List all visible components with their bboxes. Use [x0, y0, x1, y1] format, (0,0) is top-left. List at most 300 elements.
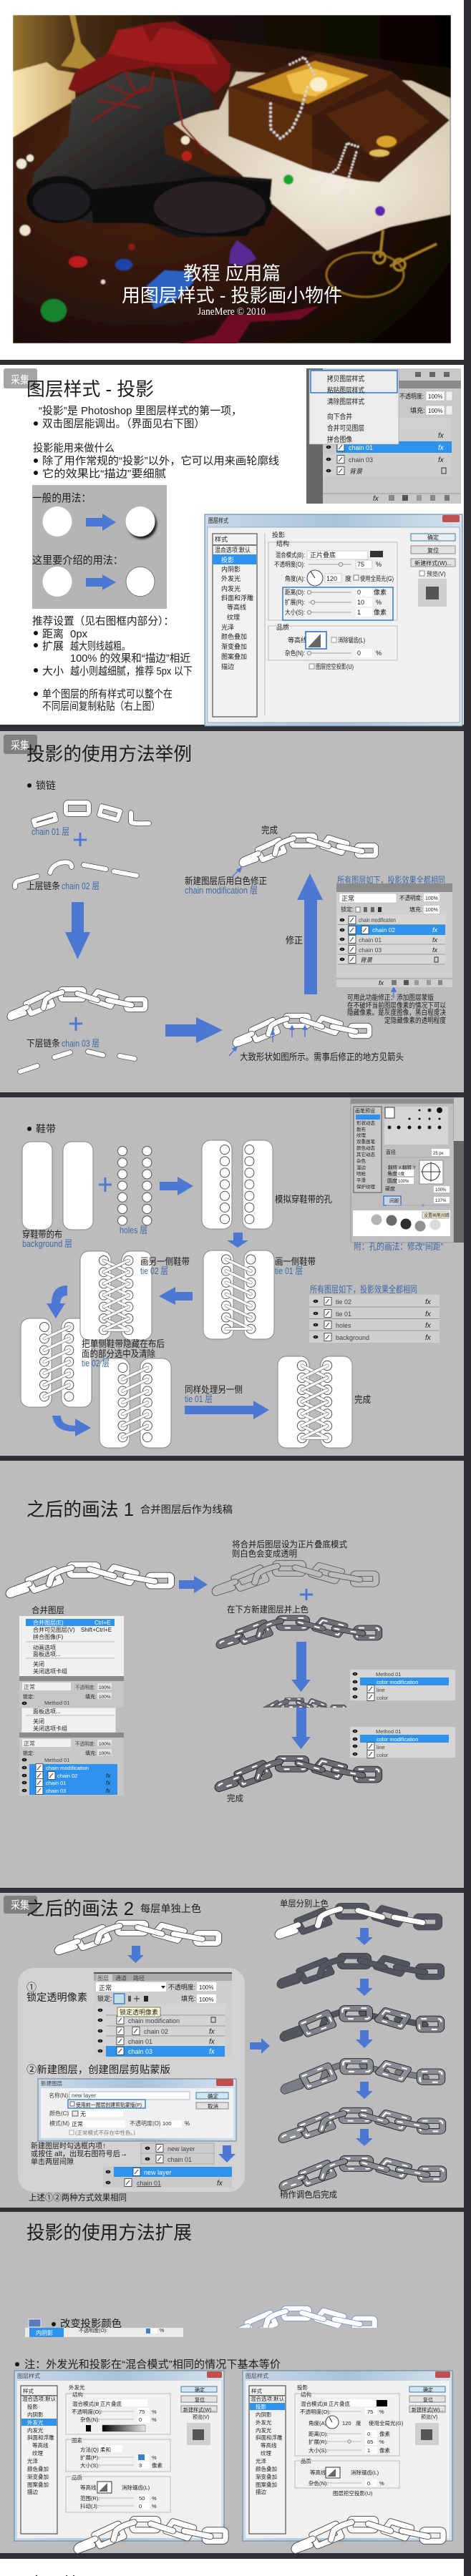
step one label	[26, 1982, 87, 2003]
layers list	[309, 1295, 440, 1343]
drop shadow dialog: 不透明度(O):	[300, 2408, 331, 2415]
label color each layer: 单层分别上色	[280, 1899, 329, 1909]
layers panel lock: 100%	[199, 1997, 213, 2003]
layers panel: chain 02	[372, 926, 395, 934]
merge menu and panels: 不透明度:	[75, 1740, 95, 1747]
heading: 之后的画法 1	[26, 1499, 134, 1520]
note layer mask	[347, 993, 446, 1025]
drop shadow dialog: 确定	[423, 2386, 433, 2393]
drop shadow dialog: 正片叠底	[329, 2400, 350, 2407]
new layer dialog: 新建图层	[41, 2080, 62, 2087]
plus	[300, 1589, 313, 1600]
layers panel: fx	[432, 926, 438, 934]
layers panel lock: chain 03	[128, 2048, 152, 2055]
bullet change color: 改变投影颜色	[60, 2318, 122, 2329]
mini layers	[141, 2143, 214, 2164]
merge menu and panels: 关闭选项卡组	[33, 1667, 67, 1675]
chain step 3 metal links	[283, 2008, 441, 2039]
layers mini panel 1: line	[377, 1687, 385, 1693]
drop shadow dialog: 样式	[251, 2387, 262, 2394]
layer style dialog: 像素	[374, 608, 387, 616]
drop shadow dialog: 扩展(R):	[309, 2438, 328, 2445]
arrow right	[250, 2038, 270, 2054]
layers list: tie 01	[336, 1311, 351, 1318]
merge menu and panels: 合并图层(E)	[33, 1619, 64, 1626]
blue shadow chain	[236, 2305, 378, 2328]
label tie 01: 画一侧鞋带	[275, 1256, 316, 1267]
outer glow dialog: 纹理	[32, 2449, 43, 2457]
outer glow dialog: 范围(R):	[80, 2494, 100, 2502]
brush panel: 喷枪	[356, 1170, 366, 1177]
layers panel: 填充:	[409, 906, 422, 913]
drop shadow dialog: 描边	[256, 2488, 266, 2495]
merge menu and panels: 关闭选项卡组	[33, 1725, 67, 1732]
merge menu and panels: 拼合图像(F)	[33, 1633, 64, 1640]
outer glow dialog: 图案叠加	[27, 2481, 49, 2488]
layer style dialog: 1	[357, 609, 361, 616]
layer style dialog: 纹理	[227, 613, 240, 621]
layer style dialog: 像素	[374, 588, 387, 596]
merge menu and panels: 填充:	[85, 1693, 97, 1700]
label chain 01: chain 01 层	[31, 826, 69, 837]
layer style dialog: 投影	[221, 556, 234, 564]
background cloth pieces	[22, 1142, 93, 1230]
badge: 采集	[11, 374, 29, 386]
layers mini panel 2: line	[377, 1744, 385, 1750]
drop shadow dialog: 使用全局光(G)	[369, 2419, 404, 2426]
outer glow dialog: 内发光	[27, 2426, 44, 2434]
merge menu and panels: 关闭	[33, 1718, 44, 1725]
outer glow dialog: %	[152, 2454, 157, 2461]
dialog strip	[25, 2327, 183, 2337]
layers panel: 不透明度:	[399, 894, 422, 901]
layers panel with context menu: 清除图层样式	[327, 397, 364, 406]
outer glow dialog: 方法(Q):	[80, 2446, 100, 2453]
brush panel: 硬度	[385, 1185, 395, 1192]
new layer dialog: 使用前一图层创建剪贴蒙版(P)	[76, 2101, 142, 2108]
outer glow dialog: 混合选项:默认	[22, 2395, 57, 2402]
merge menu and panels: Ctrl+E	[94, 1620, 110, 1626]
merge menu and panels: 面板选项...	[33, 1708, 61, 1715]
merge menu and panels: fx	[106, 1788, 111, 1794]
drop shadow dialog: 混合模式(B):	[301, 2400, 331, 2407]
layer style dialog: 新建样式(W)...	[414, 559, 452, 567]
layers clipped result: new layer	[144, 2169, 172, 2176]
drop shadow dialog: 图层挖空投影(U)	[333, 2489, 373, 2497]
layers panel lock: chain modification	[128, 2017, 180, 2024]
layer style dialog: %	[376, 650, 382, 657]
layers panel lock: chain 02	[144, 2028, 168, 2035]
recommended settings: 0px	[70, 628, 88, 640]
brush panel: 散布	[356, 1126, 366, 1132]
layer style dialog: 预览(V)	[427, 570, 446, 577]
layer style dialog: 杂色(N):	[285, 649, 305, 657]
outer glow dialog: 0	[139, 2416, 142, 2423]
outer glow dialog: 内阴影	[27, 2411, 44, 2418]
layer style dialog: 正片叠底	[310, 551, 336, 559]
label chain 03: 下层链条	[26, 1038, 60, 1049]
recommended settings: 100% 的效果和“描边”相近	[70, 652, 190, 665]
note layer mask: 隐藏像素。是灰度图像，黑白程度决	[347, 1008, 446, 1017]
holes layer	[117, 1146, 152, 1225]
caption hide behind cloth: tie 02 层	[82, 1358, 110, 1368]
drop shadow dialog: 结构	[301, 2391, 311, 2398]
drop shadow dialog: 65	[367, 2439, 373, 2445]
panel: layer style drop shadow intro	[4, 368, 462, 726]
drop shadow dialog: 像素	[379, 2447, 390, 2454]
drop shadow dialog: 品质	[301, 2457, 311, 2464]
layers panel lock: fx	[209, 2028, 215, 2036]
caption multiply: 则白色会变成透明	[232, 1548, 297, 1559]
brush panel: 颜色动态	[356, 1145, 375, 1151]
outer glow dialog: 外发光	[27, 2419, 44, 2426]
layers panel: chain 01	[359, 936, 382, 944]
drop shadow dialog	[243, 2371, 452, 2541]
layers panel: fx	[432, 946, 438, 954]
colored chain	[219, 1618, 379, 1646]
drop shadow dialog: 等高线:	[310, 2469, 328, 2476]
cover painting	[13, 15, 451, 345]
new layer dialog: 模式(M):	[49, 2120, 71, 2127]
caption modification	[185, 876, 267, 896]
brush panel: 翻转 X	[388, 1164, 402, 1170]
heading: 投影的使用方法举例	[26, 743, 192, 765]
new layer dialog	[38, 2079, 236, 2141]
outer glow dialog: 柔和	[100, 2446, 111, 2453]
recommended settings: 大小	[42, 665, 64, 677]
layers clipped result	[103, 2167, 232, 2188]
both ties stage	[80, 1251, 152, 1340]
outer glow dialog: 消除锯齿(L)	[122, 2484, 150, 2491]
subheading shoelace: 鞋带	[36, 1123, 56, 1135]
recommended settings: 不同层间复制粘贴（右上图）	[42, 700, 160, 712]
label tie 02: 画另一侧鞋带	[140, 1256, 190, 1267]
label chain 02	[26, 881, 99, 891]
mini layers: new layer	[167, 2145, 195, 2153]
layer style dialog: 复位	[427, 547, 439, 554]
brush panel: 角度:	[387, 1170, 399, 1177]
outer glow dialog: 确定	[195, 2386, 205, 2393]
layer style dialog: 10	[357, 599, 364, 606]
demo box: 这里要介绍的用法：	[32, 554, 123, 567]
outer glow dialog: 投影	[27, 2403, 38, 2410]
layer style dialog: 0	[357, 589, 361, 596]
caption all layers: 所有图层如下，投影效果全都相同	[310, 1284, 417, 1295]
layers panel: 背景	[360, 956, 373, 964]
caption same other side	[185, 1384, 243, 1404]
layer style dialog: 外发光	[221, 574, 241, 582]
layers panel: fx	[432, 936, 438, 944]
layers panel: 正常	[341, 894, 354, 902]
outer glow dialog: 描边	[27, 2488, 38, 2495]
cover credit: JaneMere © 2010	[198, 306, 266, 318]
intro text	[33, 404, 279, 480]
recommended settings: 距离	[42, 628, 64, 640]
brush panel: 保护纹理	[356, 1183, 375, 1190]
caption alt click: 或按住 alt，出现右图符号后→	[31, 2149, 127, 2158]
layer style dialog: 确定	[427, 534, 439, 541]
drop shadow dialog: 像素	[379, 2430, 390, 2437]
line art chain	[215, 1563, 376, 1593]
outer glow dialog: 75	[139, 2409, 145, 2415]
outer glow dialog: 像素	[152, 2462, 162, 2469]
label chain 02: 上层链条	[26, 881, 60, 891]
outer glow dialog: 复位	[195, 2396, 205, 2403]
merge menu and panels: Method 01	[44, 1700, 69, 1706]
heading: 图层样式 - 投影	[26, 378, 154, 400]
dialog strip: 内阴影	[36, 2329, 53, 2336]
arrow down	[291, 1708, 311, 1749]
caption alt click: 新建图层时勾选框内项↑	[31, 2141, 106, 2150]
merge menu and panels: 关闭	[33, 1660, 44, 1667]
recommended settings: 越大则线越粗。	[70, 640, 130, 652]
layers panel lock: 不透明度:	[168, 1983, 195, 1991]
merge menu and panels: 面板选项...	[33, 1650, 61, 1657]
arrow right	[179, 1576, 208, 1593]
layers panel with context menu: 合并可见图层	[327, 423, 364, 433]
brush panel: 100%	[398, 1180, 409, 1184]
caption alt click	[31, 2141, 127, 2166]
drop shadow dialog: 图案叠加	[256, 2481, 277, 2488]
layers panel with context menu: 拷贝图层样式	[327, 374, 364, 383]
layers panel with context menu: 填充:	[410, 406, 425, 414]
label tie 01: tie 01 层	[275, 1265, 303, 1276]
layer style dialog: 等高线	[227, 603, 246, 611]
layers list: fx	[425, 1322, 432, 1330]
drop shadow dialog: 光泽	[256, 2457, 266, 2464]
arrow down	[356, 1979, 373, 1996]
layers panel with context menu: chain 01	[349, 444, 373, 451]
outer glow dialog	[14, 2371, 224, 2541]
demo box: 一般的用法：	[32, 492, 91, 504]
drop shadow dialog: 投影	[297, 2384, 308, 2391]
new layer dialog: 正常	[72, 2121, 83, 2127]
layers list: fx	[425, 1334, 432, 1342]
arrow down	[218, 2145, 235, 2163]
layers mini panel 2: Method 01	[376, 1728, 401, 1735]
arrow left	[159, 1287, 193, 1305]
label done: 完成	[354, 1394, 371, 1405]
layers list: fx	[425, 1311, 432, 1318]
brush panel: 湿边	[356, 1164, 366, 1170]
merge menu and panels	[19, 1616, 124, 1796]
layers clipped result: chain 01	[137, 2180, 161, 2187]
layer style dialog: 使用全局光(G)	[360, 574, 394, 582]
caption hide behind cloth: 面的部分选中及清除	[82, 1348, 155, 1359]
brush panel: 100%	[435, 1188, 447, 1192]
layers panel	[336, 883, 452, 987]
layers clipped result: fx	[217, 2180, 223, 2188]
caption modification: 新建图层后用白色修正	[185, 876, 267, 886]
arrow down	[356, 1928, 373, 1945]
layer style dialog: 0	[357, 650, 361, 657]
layers mini panel 1: color	[377, 1695, 389, 1701]
layers panel with context menu: 粘贴图层样式	[327, 386, 364, 395]
caption alt click: 单击两层间隙	[31, 2157, 74, 2166]
step two label: ②新建图层，创建图层剪贴蒙版	[26, 2064, 170, 2075]
drop shadow dialog: 复位	[423, 2396, 433, 2403]
merge menu and panels: 100%	[99, 1751, 111, 1756]
drop shadow dialog: 预览(V)	[421, 2414, 437, 2420]
layer style dialog: 斜面和浮雕	[221, 594, 253, 602]
merge menu and panels: 锁定:	[23, 1693, 34, 1700]
new layer dialog: (正常模式不存在中性色。)	[75, 2129, 135, 2136]
outer glow dialog: 图层样式	[17, 2372, 40, 2379]
brush panel: 翻转 Y	[402, 1164, 417, 1170]
layers panel lock: 填充:	[181, 1994, 196, 2002]
layer style dialog: 度	[345, 574, 351, 582]
plus	[99, 1177, 112, 1192]
layer style dialog: 内发光	[221, 584, 241, 592]
brush panel: 0度	[398, 1171, 404, 1177]
layers list: holes	[336, 1322, 351, 1329]
assembled chain	[10, 989, 145, 1018]
merge menu and panels: 动画选项	[33, 1644, 56, 1651]
outer glow dialog: 正片叠底	[100, 2400, 122, 2407]
step one label: 锁定透明像素	[26, 1992, 87, 2003]
drop shadow dialog: 斜面和浮雕	[256, 2434, 283, 2441]
brush panel	[351, 1098, 464, 1243]
layers panel with context menu: 不透明度:	[399, 392, 424, 400]
new layer dialog: %	[185, 2120, 190, 2127]
layer style dialog: 内阴影	[221, 565, 241, 573]
merge menu and panels: 不透明度:	[75, 1684, 95, 1690]
recommended settings: 越小则越细腻，推荐 5px 以下	[70, 665, 193, 677]
outer glow dialog: 图素	[72, 2437, 82, 2444]
chain step 4 metal links	[283, 2061, 442, 2091]
layers panel: chain modification	[359, 916, 396, 924]
arrow down	[356, 2030, 373, 2048]
chain fragment	[263, 1698, 346, 1708]
chain 02 layer pieces	[15, 862, 137, 887]
chain 03 layer pieces	[20, 1052, 135, 1072]
finished chain	[242, 836, 376, 864]
layers mini panel 2: color modification	[377, 1736, 418, 1743]
layer style dialog: 不透明度(O):	[274, 560, 305, 568]
recommended settings	[32, 615, 193, 712]
merge menu and panels: 100%	[99, 1685, 111, 1690]
outer glow dialog: 预览(V)	[193, 2414, 209, 2420]
hidden tie stage	[21, 1318, 92, 1407]
merge menu and panels: 正常	[24, 1684, 35, 1690]
layers panel with context menu: chain 03	[349, 456, 373, 464]
drop shadow dialog: %	[379, 2480, 384, 2487]
brush panel: 137%	[435, 1199, 447, 1203]
layers list: tie 02	[336, 1298, 351, 1306]
brush panel: 其它动态	[356, 1151, 375, 1157]
brush panel: 25 px	[433, 1152, 444, 1156]
layers panel: 锁定:	[341, 906, 354, 913]
plus	[69, 1017, 82, 1031]
note layer mask: 定隐藏像素的透明程度	[384, 1016, 446, 1025]
layer style dialog: 角度(A):	[285, 574, 305, 582]
heading: 投影的使用方法扩展	[26, 2222, 192, 2243]
layers mini panel 2: color	[377, 1752, 389, 1758]
note equivalence: 注：外发光和投影在“混合模式”相同的情况下基本等价	[24, 2358, 281, 2371]
heading	[26, 1898, 201, 1919]
caption same effect: 上述①②两种方式效果相同	[29, 2192, 127, 2203]
panel: chain example	[4, 735, 452, 1072]
outer glow dialog: %	[152, 2503, 157, 2509]
new layer dialog: 取消	[208, 2102, 218, 2110]
outer glow dialog: 渐变叠加	[27, 2473, 49, 2480]
drop shadow dialog: 外发光	[256, 2419, 272, 2426]
drop shadow dialog: 0	[367, 2480, 370, 2487]
caption same other side: tie 01 层	[185, 1394, 213, 1404]
label cloth: background 层	[22, 1238, 72, 1249]
label tie 02: tie 02 层	[140, 1265, 168, 1276]
layers panel lock: fx	[209, 2038, 215, 2046]
brush panel: 杂色	[356, 1157, 366, 1164]
drop shadow dialog: 大小(S):	[309, 2447, 328, 2454]
badge	[4, 368, 37, 388]
mini layers: chain 01	[167, 2156, 192, 2163]
merge menu and panels: 100%	[99, 1742, 111, 1747]
label cloth	[22, 1229, 72, 1249]
caption merge: 合并图层	[31, 1605, 64, 1615]
merge menu and panels: fx	[106, 1780, 111, 1786]
brush panel: 形状动态	[356, 1120, 375, 1126]
new layer dialog: 名称(N):	[49, 2092, 69, 2099]
arrow down	[356, 2129, 373, 2146]
small correction arrows	[229, 868, 396, 1056]
layers mini panel 1: color modification	[377, 1679, 418, 1685]
white chain	[57, 1923, 218, 1952]
arrow down small	[227, 1233, 248, 1248]
outer glow dialog: 样式	[23, 2387, 34, 2394]
drop shadow dialog: 新建样式(W)...	[412, 2406, 444, 2413]
drop shadow dialog: 投影	[256, 2403, 266, 2410]
layers list: background	[336, 1334, 369, 1341]
outer glow dialog: 混合模式(B):	[72, 2400, 102, 2407]
label done: 完成	[227, 1793, 243, 1803]
caption modification: chain modification 层	[185, 885, 258, 896]
drop shadow dialog: 距离(D):	[309, 2430, 328, 2437]
layers panel lock: 图层	[97, 1975, 109, 1982]
outer glow dialog: 斜面和浮雕	[27, 2434, 54, 2441]
layers panel with context menu: fx	[438, 444, 445, 452]
brush panel: 纹理	[356, 1132, 366, 1138]
layer style dialog: 图层挖空投影(U)	[316, 662, 354, 670]
cover title line 2: 用图层样式 - 投影画小物件	[122, 285, 342, 306]
drop shadow dialog: 等高线	[261, 2442, 277, 2449]
brush panel: 画笔预设	[355, 1107, 375, 1114]
arrow curved left	[47, 1285, 67, 1318]
layer style dialog: %	[376, 561, 382, 568]
layers panel lock: chain 01	[128, 2038, 152, 2045]
heading: 合并图层后作为线稿	[140, 1504, 233, 1515]
layer style dialog: 品质	[276, 623, 289, 631]
dialog strip: 不透明度(O):	[79, 2327, 107, 2333]
new layer dialog: 无	[80, 2111, 86, 2117]
panel: extension	[14, 2222, 452, 2551]
panel: method 1	[9, 1499, 455, 1803]
layers panel lock: 通道	[115, 1974, 127, 1982]
drop shadow dialog: 渐变叠加	[256, 2473, 277, 2480]
new layer dialog: 颜色(C):	[49, 2110, 70, 2117]
plus	[74, 833, 87, 846]
heading	[26, 1499, 233, 1520]
layers mini panel 2	[350, 1727, 455, 1758]
recommended settings: 单个图层的所有样式可以整个在	[42, 688, 173, 700]
caption multiply	[232, 1539, 347, 1559]
layer style dialog: 图案叠加	[221, 652, 247, 660]
brush panel: 直径	[386, 1149, 396, 1155]
brush panel: 圆度:	[387, 1177, 399, 1184]
chain over drop shadow dialog	[294, 2519, 443, 2551]
arrow up	[297, 873, 323, 994]
finished lacing	[278, 1356, 352, 1448]
